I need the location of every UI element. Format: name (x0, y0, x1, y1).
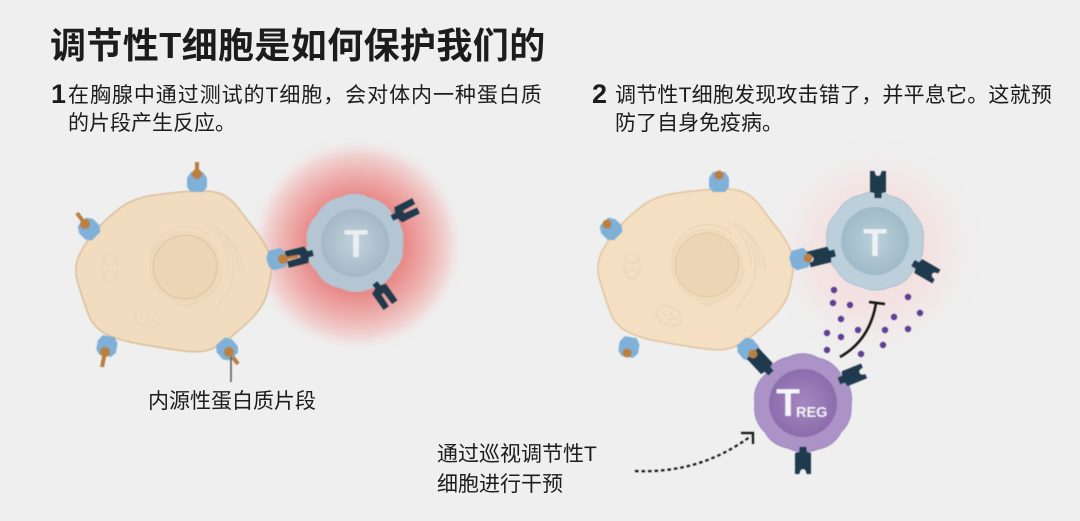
step 1 description: 在胸腺中通过测试的T细胞，会对体内一种蛋白质 (68, 84, 543, 107)
T cell right receptor (909, 256, 940, 283)
patrol label: 通过巡视调节性T (437, 443, 597, 466)
peptide label: 内源性蛋白质片段 (148, 390, 316, 413)
step 2 description: 防了自身免疫病。 (615, 112, 783, 135)
step 2 number: 2 (592, 79, 607, 109)
dotted arrow to Treg (635, 433, 753, 471)
T cell lower receptor (368, 278, 397, 310)
engaged receptor and peptide (265, 245, 315, 271)
inhibition arrow (840, 302, 885, 357)
body cell (76, 191, 271, 352)
title: 调节性T细胞是如何保护我们的 (50, 25, 546, 66)
peptide on lower-right receptor (213, 335, 241, 364)
peptide on top receptor (187, 162, 207, 192)
Treg cell: T (776, 382, 800, 425)
peptide on upper-left receptor (75, 213, 103, 243)
T cell: T (863, 222, 887, 265)
red inflammation halo (249, 137, 465, 353)
step 1 description: 的片段产生反应。 (68, 112, 236, 135)
suppressive signal dots (824, 287, 923, 357)
panel: step 1 diagram (75, 137, 465, 382)
lower-left receptor with peptide (617, 335, 641, 359)
panel: step 2 diagram (597, 138, 983, 474)
peptide on lower-left receptor (95, 334, 119, 367)
body cell (598, 189, 793, 350)
faint pink halo (767, 138, 983, 362)
top receptor with peptide (709, 170, 729, 192)
Treg bottom receptor (795, 447, 811, 474)
upper-left receptor with peptide (597, 215, 625, 243)
T cell top receptor (870, 171, 886, 198)
Treg engaged receptor (734, 335, 777, 378)
T cell engaged receptor (788, 245, 837, 271)
leader line to peptide (230, 357, 232, 382)
T cell: T (344, 223, 368, 266)
patrol label: 细胞进行干预 (437, 473, 563, 496)
Treg cell: REG (796, 405, 827, 421)
T cell (307, 194, 404, 292)
T cell (827, 192, 924, 290)
T cell upper receptor (388, 198, 420, 226)
step 1 number: 1 (51, 79, 66, 109)
step 2 description: 调节性T细胞发现攻击错了，并平息它。这就预 (615, 84, 1052, 107)
Treg right receptor (836, 363, 867, 388)
Treg cell (755, 354, 852, 452)
